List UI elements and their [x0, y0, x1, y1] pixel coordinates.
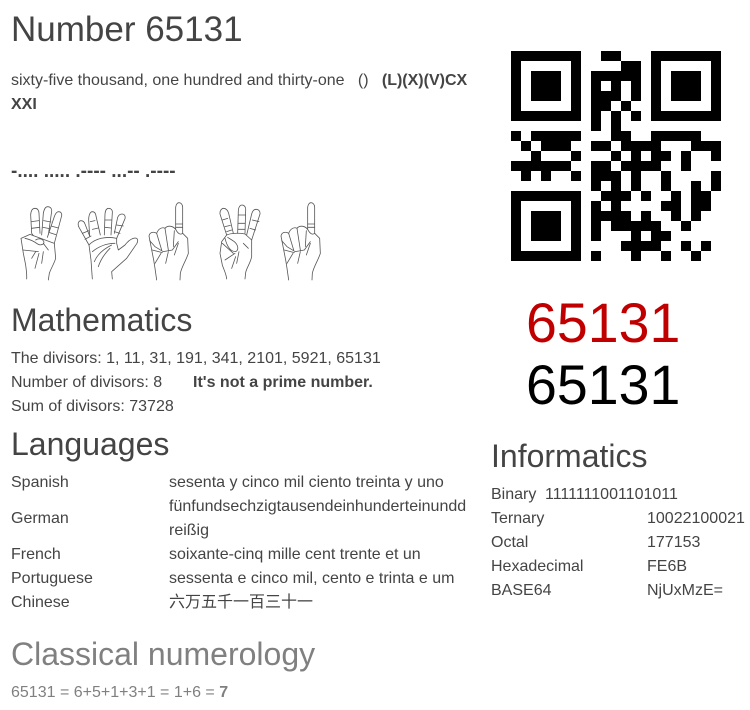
- languages table: fünfundsechzigtausendeinhunderteinundd: [169, 498, 466, 515]
- informatics table: Ternary: [491, 510, 544, 527]
- informatics table: Binary: [491, 486, 536, 503]
- languages table: Portuguese: [11, 570, 93, 587]
- informatics table: Hexadecimal: [491, 558, 583, 575]
- informatics table: BASE64: [491, 582, 551, 599]
- languages table: [11, 474, 466, 611]
- hand: digit 5: [78, 208, 138, 279]
- languages table: Spanish: [11, 474, 69, 491]
- large number in black: 65131: [526, 354, 680, 416]
- languages table: reißig: [169, 522, 209, 539]
- languages table: Chinese: [11, 594, 70, 611]
- languages table: soixante-cinq mille cent trente et un: [169, 546, 421, 563]
- number of divisors: Number of divisors: 8: [11, 374, 162, 391]
- sign language hands: [20, 202, 321, 280]
- divisors list: The divisors: 1, 11, 31, 191, 341, 2101, 5921, 65131: [11, 350, 381, 367]
- number in words and roman numeral: [11, 72, 467, 113]
- informatics table: 1111111001101011: [545, 486, 678, 503]
- hand: digit 1: [281, 203, 320, 280]
- sum of divisors: Sum of divisors: 73728: [11, 398, 174, 415]
- informatics table: NjUxMzE=: [647, 582, 723, 599]
- heading: informatics: Informatics: [491, 438, 647, 474]
- large number in red: 65131: [526, 292, 680, 354]
- languages table: 六万五千一百三十一: [169, 594, 313, 611]
- numerology calculation: 65131 = 6+5+1+3+1 = 1+6 = 7: [11, 684, 228, 701]
- languages table: German: [11, 510, 69, 527]
- title: Number 65131: [11, 10, 243, 49]
- informatics table: 177153: [647, 534, 700, 551]
- prime status: It's not a prime number.: [193, 374, 373, 391]
- heading: mathematics: Mathematics: [11, 302, 192, 338]
- QR code: [511, 51, 721, 261]
- number in words and roman numeral: sixty-five thousand, one hundred and thirty-one () (L)(X)(V)CX: [11, 72, 467, 89]
- languages table: sesenta y cinco mil ciento treinta y uno: [169, 474, 444, 491]
- informatics table: FE6B: [647, 558, 687, 575]
- morse code: -.... ..... .---- ...-- .----: [11, 161, 176, 182]
- number in words and roman numeral: XXI: [11, 96, 37, 113]
- languages table: sessenta e cinco mil, cento e trinta e um: [169, 570, 454, 587]
- informatics table: 10022100021: [647, 510, 745, 527]
- hand: digit 6: [21, 207, 62, 280]
- heading: languages: Languages: [11, 426, 169, 462]
- hand: digit 1: [149, 203, 188, 280]
- languages table: French: [11, 546, 61, 563]
- heading: classical numerology: Classical numerology: [11, 636, 315, 672]
- informatics table: Octal: [491, 534, 528, 551]
- hand: digit 3: [220, 205, 260, 279]
- informatics table: [491, 486, 745, 599]
